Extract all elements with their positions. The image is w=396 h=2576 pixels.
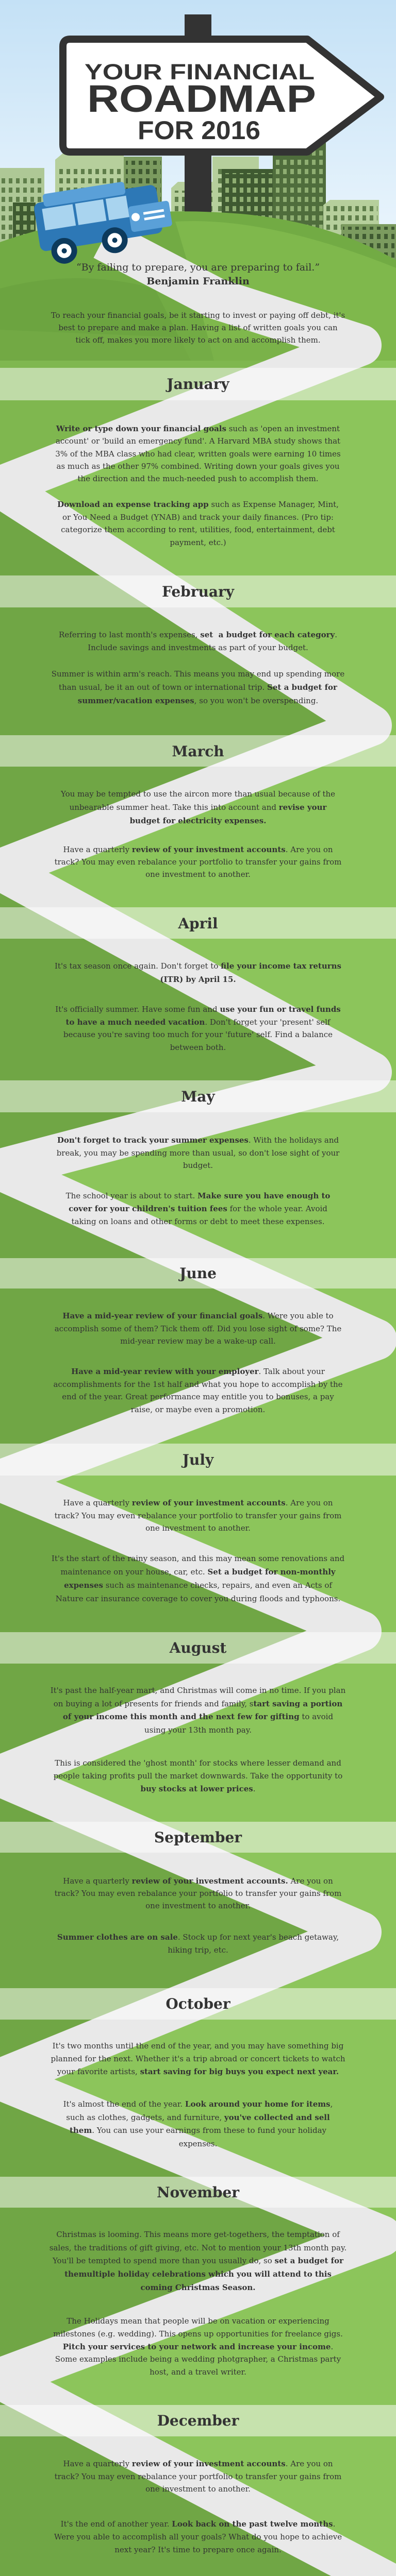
September text 1: Have a quarterly review of your investment accounts. Are you on [63,1876,333,1886]
February text 1: Include savings and investments as part of your budget. [88,643,308,652]
January text 2: payment, etc.) [170,538,226,547]
February text 2: summer/vacation expenses, so you won't be overspending. [78,696,318,705]
panel: June: June [179,1265,217,1282]
sky [0,0,396,268]
May text 2: taking on loans and other forms or debt to meet these expenses. [71,1217,325,1226]
January text 1: the direction and the much-needed push to accomplish them. [77,474,319,483]
December text 2: It's the end of another year. Look back on the past twelve months. [61,2519,335,2529]
January text 2: categorize them according to rent, utilities, food, entertainment, debt [61,525,335,534]
May text 1: break, you may be spending more than usual, so don't lose sight of your [57,1148,339,1157]
October text 1: It's two months until the end of the year, and you may have something big [53,2041,343,2050]
October text 1: planned for the next. Whether it's a trip abroad or concert tickets to watch [51,2054,345,2063]
August text 2 [54,1758,342,1793]
October text 2: them. You can use your earnings from these to fund your holiday [70,2126,326,2135]
July text 1: one investment to another. [145,1523,251,1533]
October text 2: expenses. [179,2139,217,2148]
December text 1: one investment to another. [145,2484,251,2494]
intro text: tick off, makes you more likely to act on and accomplish them. [75,335,321,345]
October text 2 [63,2099,333,2148]
intro text: To reach your financial goals, be it starting to invest or paying off debt, it's [51,311,345,320]
October text 1: your favorite artists, start saving for big buys you expect next year. [57,2067,339,2076]
signpost: YOUR FINANCIAL [85,60,315,84]
April text 2: because you're saving too much for your 'future' self. Find a balance [63,1030,333,1039]
February text 2: Summer is within arm's reach. This means you may end up spending more [52,669,344,679]
March text 2 [55,845,341,879]
November text 1: You'll be tempted to spend more than you usually do, so set a budget for [53,2256,343,2265]
July text 2: It's the start of the rainy season, and this may mean some renovations and [52,1554,344,1563]
July text 1: Have a quarterly review of your investment accounts. Are you on [63,1498,333,1507]
April text 2: to have a much needed vacation. Don't forget your 'present' self [66,1018,330,1027]
May text 1: budget. [183,1161,213,1170]
panel: July: July [183,1451,213,1468]
August text 1: of your income this month and the next few for gifting to avoid [63,1712,333,1721]
October text 2: such as clothes, gadgets, and furniture, you've collected and sell [66,2113,330,2122]
October text 1 [51,2041,345,2076]
June text 2 [53,1367,343,1414]
September text 2: Summer clothes are on sale. Stock up for next year's beach getaway, [57,1933,339,1942]
August text 1: using your 13th month pay. [144,1725,252,1735]
panel: December: December [157,2412,239,2429]
November text 2: The Holidays mean that people will be on vacation or experiencing [67,2316,329,2326]
quote [76,262,320,287]
March text 2: one investment to another. [145,870,251,879]
March text 1: unbearable summer heat. Take this into account and revise your [70,803,326,812]
June text 1: accomplish some of them? Tick them off. Did you lose sight of some? The [55,1324,341,1333]
April text 2 [55,1005,341,1052]
November text 2: Some examples include being a wedding photgrapher, a Christmas party [55,2354,341,2364]
panel: August: August [170,1639,226,1656]
January text 1: Write or type down your financial goals such as 'open an investment [56,424,340,433]
June text 1: Have a mid-year review of your financial goals. Were you able to [62,1311,334,1320]
March text 1: budget for electricity expenses. [130,816,266,825]
January text 2: or You Need a Budget (YNAB) and track your daily finances. (Pro tip: [62,512,334,521]
panel: April: April [178,915,218,932]
August text 2: This is considered the 'ghost month' for stocks where lesser demand and [55,1758,341,1768]
May text 2: The school year is about to start. Make sure you have enough to [66,1191,330,1200]
June text 2: end of the year. Great performance may entitle you to bonuses, a pay [62,1392,334,1401]
November text 2: milestones (e.g. wedding). This opens up opportunities for freelance gigs. [53,2329,343,2338]
June text 1: mid-year review may be a wake-up call. [120,1336,276,1346]
June text 2: accomplishments for the 1st half and what you hope to accomplish by the [53,1380,343,1389]
July text 2: maintenance on your house, car, etc. Set a budget for non-monthly [60,1567,336,1577]
February text 2: than usual, be it an out of town or international trip. Set a budget for [59,683,337,692]
quote: “By failing to prepare, you are preparing to fail.” [76,262,320,273]
signpost: FOR 2016 [138,116,260,145]
May text 2 [66,1191,330,1226]
March text 1: You may be tempted to use the aircon more than usual because of the [61,789,335,799]
November text 2: Pitch your services to your network and increase your income. [63,2342,333,2351]
June text 2: Have a mid-year review with your employer. Talk about your [71,1367,325,1376]
buildings [0,143,396,276]
January text 2 [57,500,339,547]
April text 1 [55,961,341,984]
May text 1: Don't forget to track your summer expenses. With the holidays and [57,1136,339,1145]
April text 2: It's officially summer. Have some fun and use your fun or travel funds [55,1005,341,1014]
June text 2: raise, or maybe even a promotion. [131,1405,265,1414]
July text 2 [52,1554,344,1603]
June text 1 [55,1311,341,1346]
September text 1: one investment to another. [145,1901,251,1910]
quote: Benjamin Franklin [146,276,250,287]
November text 1: sales, the traditions of gift giving, etc. Not to mention your 13th month pay. [50,2243,346,2252]
hills [0,211,396,371]
February text 2 [52,669,344,705]
April text 1: It's tax season once again. Don't forget to file your income tax returns [55,961,341,971]
November text 1: themultiple holiday celebrations which you will attend to this [64,2269,332,2279]
November text 1: coming Christmas Season. [140,2283,256,2292]
December text 1 [55,2459,341,2494]
panel: May: May [181,1088,215,1105]
January text 1: as much as the other 97% combined. Writing down your goals gives you [56,462,340,471]
November text 1: Christmas is looming. This means more get-togethers, the temptation of [56,2230,340,2239]
panel: October: October [166,1995,230,2012]
February text 1: Referring to last month's expenses, set a budget for each category. [59,630,337,639]
August text 1 [51,1686,345,1735]
August text 1: on buying a lot of presents for friends and family, start saving a portion [54,1699,342,1708]
May text 2: cover for your children's tuition fees for the whole year. Avoid [69,1204,327,1213]
September text 2 [57,1933,339,1955]
August text 1: It's past the half-year mart, and Christmas will come in no time. If you plan [51,1686,345,1695]
April text 2: between both. [170,1043,226,1052]
February text 1 [59,630,337,652]
September text 1: track? You may even rebalance your portfolio to transfer your gains from [55,1889,341,1898]
July text 2: expenses such as maintenance checks, repairs, and even an Acts of [64,1581,332,1590]
January text 1: 3% of the MBA class who had clear, written goals were earning 10 times [55,449,341,459]
July text 1: track? You may even rebalance your portfolio to transfer your gains from [55,1511,341,1520]
January text 1 [55,424,341,483]
panel: November: November [157,2184,239,2201]
October text 2: It's almost the end of the year. Look around your home for items, [63,2099,333,2109]
panel: February: February [162,583,234,600]
August text 2: buy stocks at lower prices. [140,1784,256,1793]
November text 1 [50,2230,346,2292]
intro text: best to prepare and make a plan. Having a list of written goals you can [58,323,338,332]
March text 2: Have a quarterly review of your investment accounts. Are you on [63,845,333,854]
intro text [51,311,345,345]
September text 1 [55,1876,341,1910]
April text 1: (ITR) by April 15. [160,975,236,984]
December text 2 [54,2519,342,2554]
December text 2: Were you able to accomplish all your goals? What do you hope to achieve [54,2532,342,2541]
November text 2 [53,2316,343,2377]
July text 2: Nature car insurance coverage to cover you during floods and typhoons. [56,1594,340,1603]
January text 1: account' or 'build an emergency fund'. A Harvard MBA study shows that [56,436,340,446]
March text 2: track? You may even rebalance your portfolio to transfer your gains from [55,857,341,867]
car [32,175,176,267]
December text 2: next year? It's time to prepare once again. [114,2545,282,2554]
December text 1: Have a quarterly review of your investment accounts. Are you on [63,2459,333,2468]
panel: January: January [167,376,229,393]
signpost: ROADMAP [87,77,316,120]
November text 2: host, and a travel writer. [150,2367,246,2377]
July text 1 [55,1498,341,1533]
August text 2: people taking profits pull the market downwards. Take the opportunity to [54,1771,342,1781]
panel: March: March [172,743,224,760]
May text 1 [57,1136,339,1170]
March text 1 [61,789,335,825]
signpost [63,14,381,221]
December text 1: track? You may even rebalance your portfolio to transfer your gains from [55,2472,341,2481]
panel: September: September [154,1829,242,1846]
September text 2: hiking trip, etc. [168,1945,228,1955]
January text 2: Download an expense tracking app such as Expense Manager, Mint, [57,500,339,509]
